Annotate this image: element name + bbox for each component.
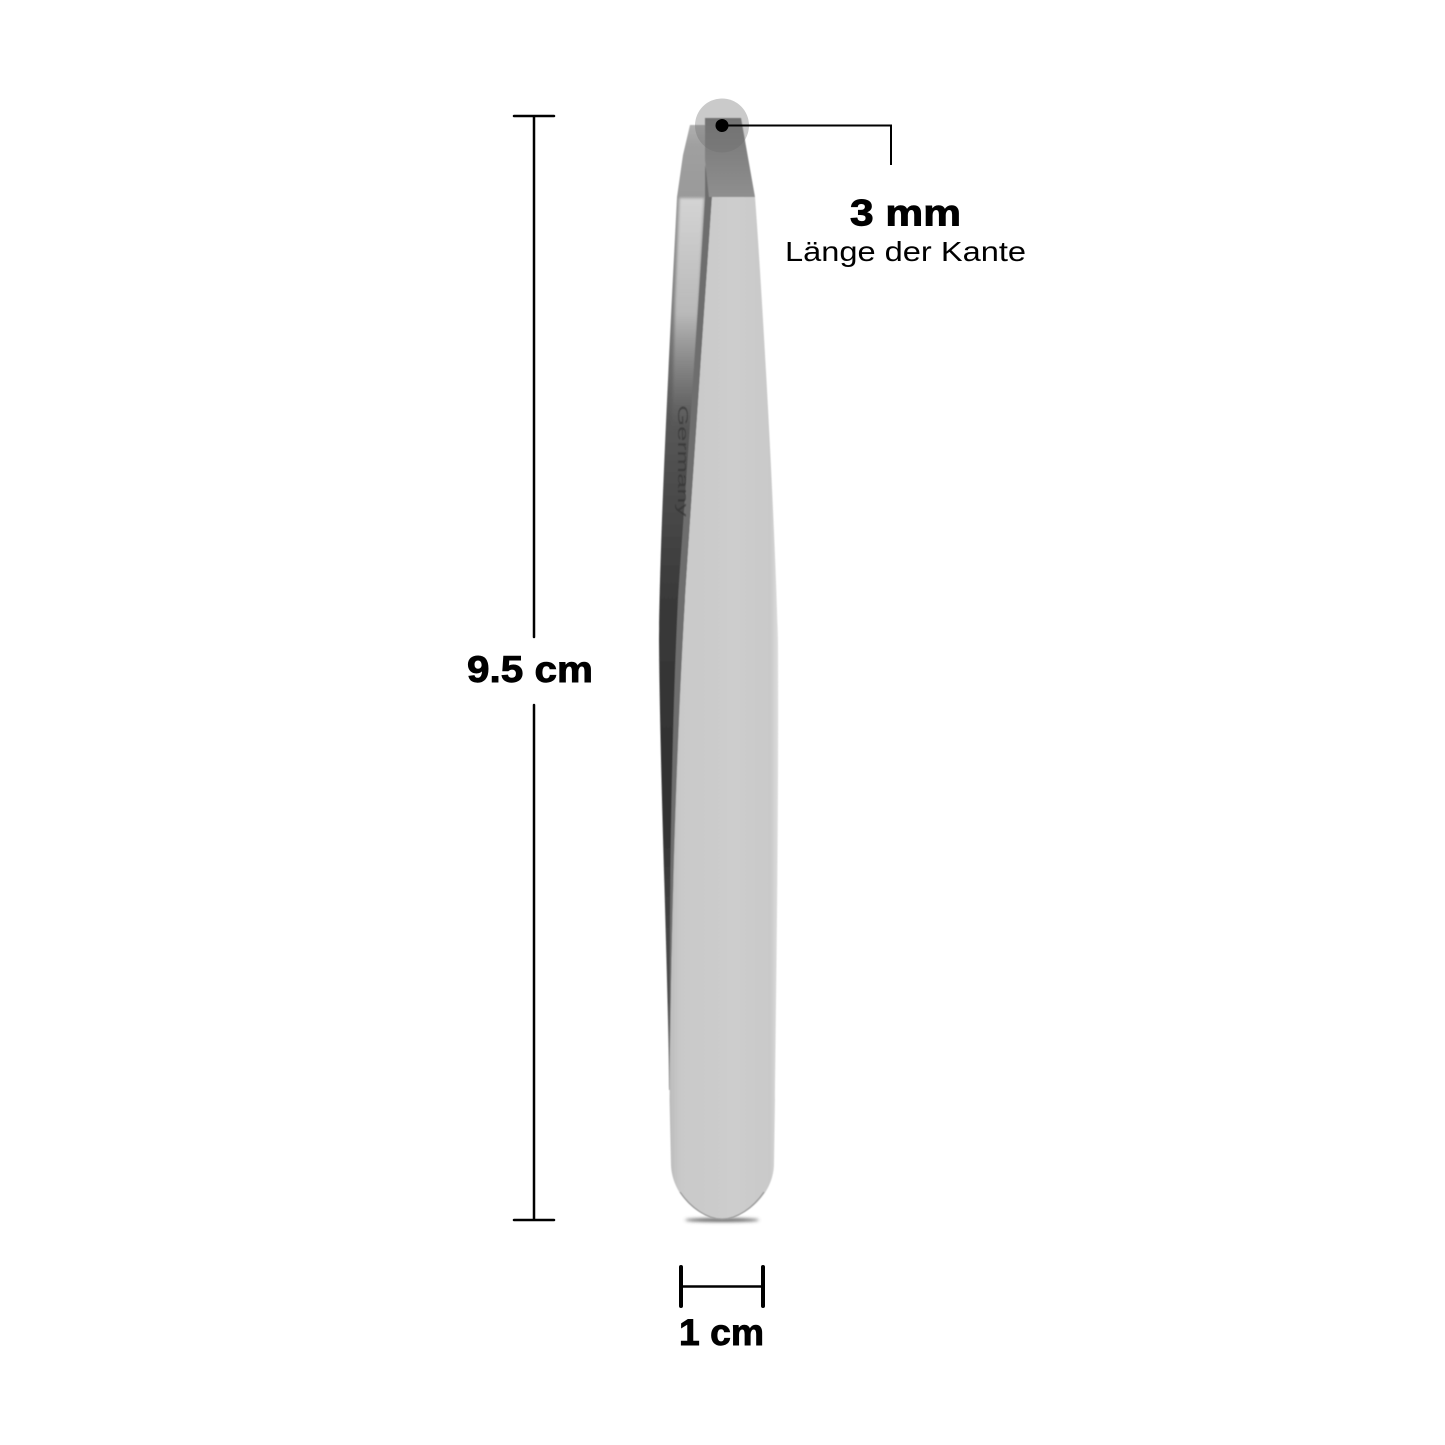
length bracket [514, 116, 554, 1220]
highlight circle on tip [695, 98, 749, 152]
width label: 1 cm [679, 1311, 764, 1353]
tweezers [659, 118, 778, 1222]
width bracket [681, 1267, 763, 1306]
callout leader line [722, 126, 891, 165]
inner sliver [670, 165, 712, 1040]
length label: 9.5 cm [467, 648, 593, 690]
back arm [659, 125, 712, 1090]
engraved marking: Germany [674, 405, 691, 518]
lower rim shading [680, 1192, 764, 1219]
back arm highlight near the tip [672, 198, 704, 430]
callout caption: Länge der Kante [785, 236, 1026, 267]
tip head [705, 118, 755, 197]
dimension: width 1 cm [679, 1267, 764, 1353]
shadow under tweezers [685, 1218, 759, 1222]
callout value: 3 mm [850, 192, 961, 234]
dimension: length 9.5 cm [467, 116, 593, 1220]
front arm [670, 197, 778, 1219]
callout: edge length [716, 119, 1026, 267]
callout dot [716, 119, 728, 132]
